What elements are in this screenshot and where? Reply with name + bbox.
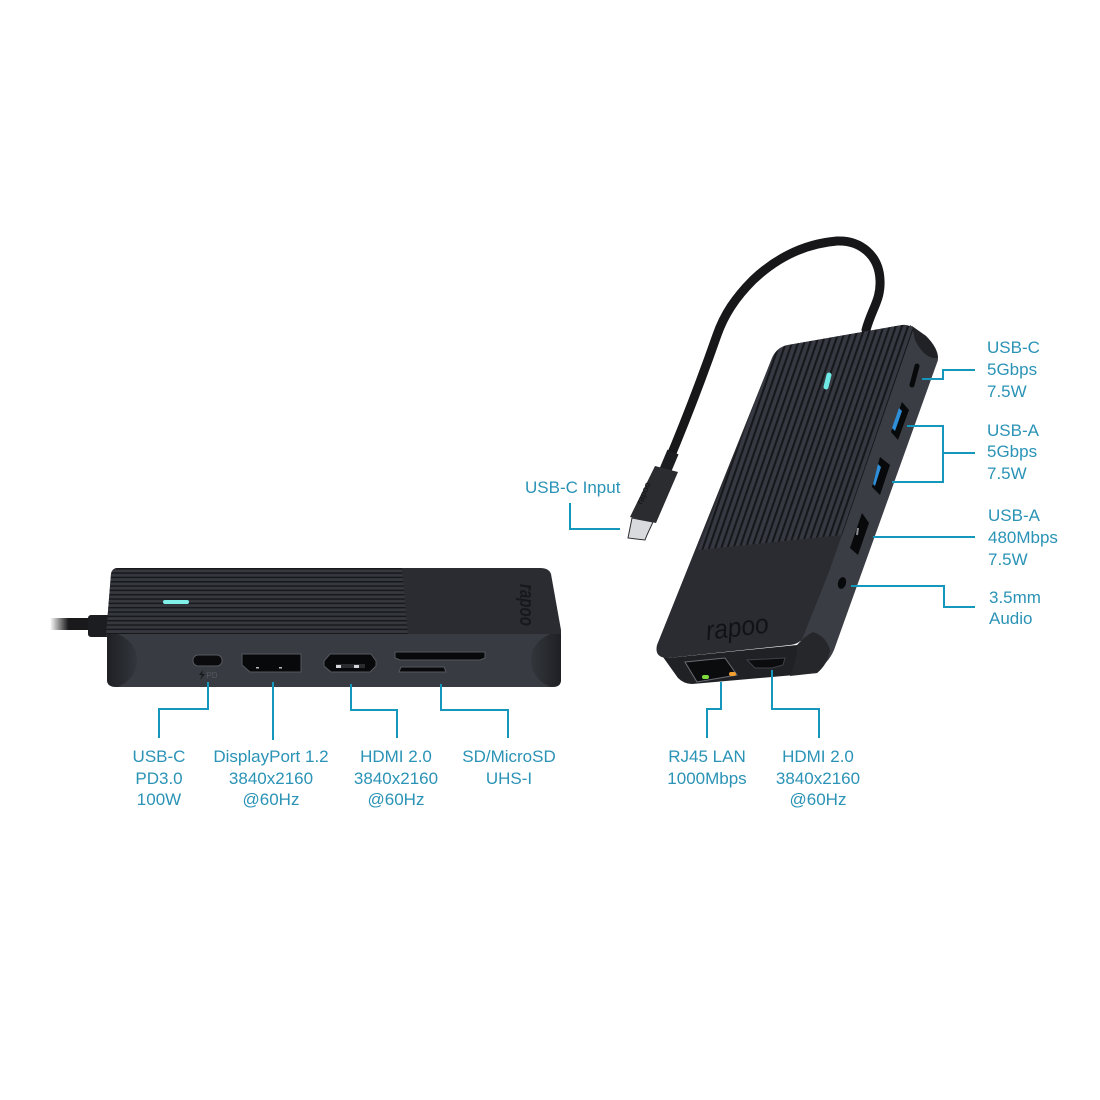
left hub device — [50, 568, 561, 687]
port: HDMI — [747, 658, 785, 668]
callouts: left hub — [133, 682, 556, 809]
callout: USB-A 5Gbps — [892, 421, 1040, 483]
callout: RJ45 LAN: 1000Mbps — [667, 769, 747, 788]
callout: USB-C 5Gbps: USB-C — [987, 338, 1040, 357]
callout: HDMI right — [772, 670, 860, 809]
port: USB-C PD: PD — [206, 671, 218, 680]
callout: SD/MicroSD — [441, 684, 556, 788]
callout: HDMI right: HDMI 2.0 — [782, 747, 854, 766]
port: USB-A blue 2 — [872, 457, 890, 495]
rubber corners — [790, 326, 938, 676]
callout: USB-C Input — [525, 478, 621, 529]
callout: USB-C 5Gbps: 7.5W — [987, 382, 1027, 401]
callout: USB-C 5Gbps — [922, 338, 1040, 401]
callout: DisplayPort: @60Hz — [243, 790, 299, 809]
callout: USB-A 480Mbps — [873, 506, 1058, 569]
callout: USB-C PD3.0: 100W — [137, 790, 181, 809]
ribbed section — [698, 325, 913, 550]
callout: RJ45 LAN: RJ45 LAN — [668, 747, 746, 766]
callout: USB-A 480Mbps: 7.5W — [988, 550, 1028, 569]
top surface — [656, 325, 913, 658]
status light — [163, 600, 189, 604]
callout: SD/MicroSD: UHS-I — [486, 769, 532, 788]
callouts: right hub — [525, 338, 1058, 809]
callout: 3.5mm Audio: 3.5mm — [989, 588, 1041, 607]
callout: DisplayPort: 3840x2160 — [229, 769, 313, 788]
callout: HDMI right: @60Hz — [790, 790, 846, 809]
callout: USB-A 480Mbps: 480Mbps — [988, 528, 1058, 547]
callout: HDMI left: 3840x2160 — [354, 769, 438, 788]
callout: USB-A 5Gbps: USB-A — [987, 421, 1040, 440]
callout: DisplayPort: DisplayPort 1.2 — [213, 747, 329, 766]
USB-C plug — [628, 452, 678, 540]
rapoo logo: rapoo — [704, 609, 770, 646]
callout: 3.5mm Audio: Audio — [989, 609, 1032, 628]
callout: USB-C PD3.0 — [133, 682, 208, 809]
ribbed section — [106, 568, 408, 636]
callout: HDMI left: @60Hz — [368, 790, 424, 809]
callout: SD/MicroSD: SD/MicroSD — [462, 747, 556, 766]
callout: HDMI left — [351, 684, 438, 809]
hub top surface — [106, 568, 561, 636]
callout: RJ45 LAN — [667, 682, 747, 788]
side face — [800, 325, 938, 672]
port: USB-A blue 1 — [891, 402, 909, 440]
rapoo logo: rapoo — [515, 584, 537, 626]
callout: USB-C Input: USB-C Input — [525, 478, 621, 497]
status light — [826, 375, 829, 387]
USB-C plug: rapoo — [635, 481, 652, 506]
port: USB-C — [912, 366, 917, 385]
port: audio jack — [837, 576, 847, 590]
callout: USB-C PD3.0: PD3.0 — [135, 769, 183, 788]
port: RJ45 — [685, 658, 737, 682]
port: DisplayPort — [242, 654, 301, 672]
port: HDMI — [324, 654, 376, 672]
callout: USB-C PD3.0: USB-C — [133, 747, 185, 766]
port: SD slot — [395, 652, 485, 660]
port: USB-C PD — [193, 655, 222, 680]
hub front face — [107, 634, 561, 687]
rubber corners — [107, 634, 561, 687]
callout: USB-A 5Gbps: 7.5W — [987, 464, 1027, 483]
callout: HDMI right: 3840x2160 — [776, 769, 860, 788]
input cable — [50, 615, 112, 637]
callout: USB-A 5Gbps: 5Gbps — [987, 442, 1037, 461]
port: microSD slot — [399, 667, 446, 672]
callout: DisplayPort — [213, 682, 329, 809]
callout: 3.5mm Audio — [851, 586, 1041, 628]
callout: HDMI left: HDMI 2.0 — [360, 747, 432, 766]
port: USB-A black — [850, 513, 869, 555]
USB-C cable — [667, 241, 880, 465]
callout: USB-A 480Mbps: USB-A — [988, 506, 1041, 525]
right hub device — [628, 241, 938, 684]
callout: USB-C 5Gbps: 5Gbps — [987, 360, 1037, 379]
front face — [658, 645, 830, 684]
